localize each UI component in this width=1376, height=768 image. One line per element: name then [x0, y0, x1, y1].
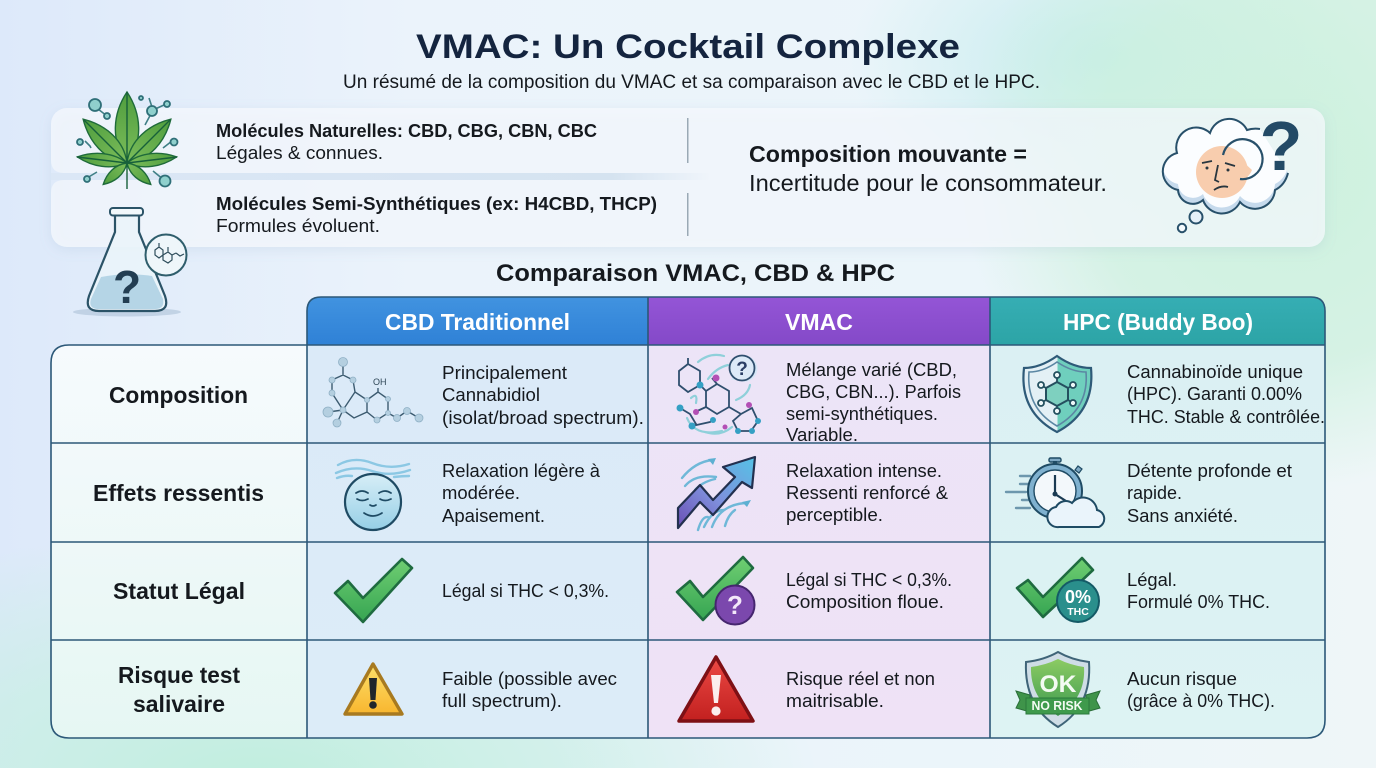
semi-synthetic molecules text: Formules évoluent. — [216, 215, 380, 236]
cell: VMAC composition: Variable. — [786, 424, 858, 445]
moving composition callout — [749, 141, 1107, 196]
moving composition callout: Composition mouvante = — [749, 141, 1027, 167]
cell: VMAC legal: Légal si THC < 0,3%. — [786, 569, 952, 590]
icon: check with 0% THC badge: 0% — [1065, 587, 1091, 607]
cell: CBD legal: Légal si THC < 0,3%. — [442, 580, 609, 601]
panel: composition summary — [51, 108, 1325, 247]
row labels column: Effets ressentis — [93, 480, 264, 506]
icon: confused thought bubble: ? — [1260, 107, 1302, 185]
cell: HPC effects — [1006, 458, 1292, 527]
cell: VMAC composition: CBG, CBN...). Parfois — [786, 381, 961, 402]
icon: OK no risk shield — [1016, 652, 1100, 727]
icon: flask with question mark: ? — [113, 261, 141, 313]
icon: cannabidiol molecule — [323, 358, 423, 427]
cell: CBD risk — [345, 664, 617, 714]
cell: HPC effects: rapide. — [1127, 482, 1182, 503]
column: HPC: HPC (Buddy Boo) — [1063, 309, 1253, 335]
cell: CBD effects — [336, 460, 601, 530]
row labels column: Risque test — [118, 662, 240, 688]
icon: check with question mark: ? — [727, 590, 743, 620]
cell: HPC legal: Formulé 0% THC. — [1127, 591, 1270, 612]
cell: VMAC composition — [676, 355, 961, 445]
cell: HPC risk — [1016, 652, 1275, 727]
natural molecules text: Molécules Naturelles: CBD, CBG, CBN, CBC — [216, 120, 597, 141]
cell: VMAC composition: Mélange varié (CBD, — [786, 359, 957, 380]
cell: CBD composition: Cannabidiol — [442, 384, 540, 405]
row labels column: salivaire — [133, 691, 225, 717]
icon: red warning — [679, 657, 753, 721]
cell: HPC composition: THC. Stable & contrôlée. — [1127, 406, 1325, 427]
comparison table — [51, 297, 1325, 738]
icon: check with question mark — [677, 557, 754, 624]
cell: CBD effects: Relaxation légère à — [442, 460, 601, 481]
cell: VMAC risk: Risque réel et non — [786, 668, 935, 689]
cell: VMAC risk: maitrisable. — [786, 690, 884, 711]
heading: comparison: Comparaison VMAC, CBD & HPC — [496, 260, 895, 287]
icon: OK no risk shield: NO RISK — [1032, 699, 1082, 713]
cell: HPC risk: (grâce à 0% THC). — [1127, 690, 1275, 711]
icon: cannabidiol molecule: OH — [373, 377, 386, 387]
cell: VMAC effects: Ressenti renforcé & — [786, 482, 949, 503]
column: HPC — [990, 297, 1325, 738]
column: VMAC — [648, 297, 990, 738]
cell: HPC risk: Aucun risque — [1127, 668, 1237, 689]
icon: relaxed face — [336, 460, 410, 530]
cell: CBD risk: full spectrum). — [442, 690, 562, 711]
icon: OK no risk shield: OK — [1040, 671, 1077, 698]
icon: flask with question mark — [73, 208, 186, 316]
title: VMAC: Un Cocktail Complexe — [416, 28, 960, 66]
cell: HPC legal: Légal. — [1127, 569, 1177, 590]
cell: CBD effects: Apaisement. — [442, 505, 545, 526]
cell: VMAC legal — [677, 557, 952, 624]
icon: cannabis leaf with molecules — [76, 92, 178, 189]
column: CBD Traditionnel: CBD Traditionnel — [385, 309, 570, 335]
row labels column: Statut Légal — [113, 578, 245, 604]
column: VMAC: VMAC — [785, 309, 853, 335]
cell: HPC composition — [1023, 356, 1325, 432]
icon: rising arrow — [678, 457, 755, 530]
semi-synthetic molecules text: Molécules Semi-Synthétiques (ex: H4CBD, THCP) — [216, 193, 657, 214]
icon: check with 0% THC badge — [1017, 558, 1099, 622]
moving composition callout: Incertitude pour le consommateur. — [749, 170, 1107, 196]
icon: yellow warning — [345, 664, 402, 714]
cell: VMAC legal: Composition floue. — [786, 591, 944, 612]
cell: VMAC effects: Relaxation intense. — [786, 460, 942, 481]
natural molecules text — [216, 120, 597, 163]
semi-synthetic molecules text — [216, 193, 657, 236]
cell: HPC composition: (HPC). Garanti 0.00% — [1127, 383, 1302, 404]
cell: HPC effects: Détente profonde et — [1127, 460, 1292, 481]
subtitle: Un résumé de la composition du VMAC et sa comparaison avec le CBD et le HPC. — [343, 71, 1040, 93]
cell: VMAC effects: perceptible. — [786, 504, 883, 525]
icon: confused thought bubble — [1162, 118, 1298, 234]
icon: check with 0% THC badge: THC — [1067, 606, 1089, 618]
cell: HPC composition: Cannabinoïde unique — [1127, 361, 1303, 382]
row labels column: Composition — [109, 382, 248, 408]
column: CBD Traditionnel — [307, 297, 648, 738]
icon: green check — [335, 559, 412, 622]
cell: CBD composition: (isolat/broad spectrum). — [442, 407, 644, 428]
grid lines — [51, 297, 1325, 738]
cell: VMAC composition: semi-synthétiques. — [786, 403, 938, 424]
cell: CBD composition — [323, 358, 644, 428]
cell: HPC legal — [1017, 558, 1270, 622]
icon: stopwatch with cloud — [1006, 458, 1104, 527]
cell: CBD risk: Faible (possible avec — [442, 668, 617, 689]
row labels column — [51, 345, 307, 738]
cell: VMAC risk — [679, 657, 935, 721]
natural molecules text: Légales & connues. — [216, 142, 383, 163]
cell: CBD composition: Principalement — [442, 362, 567, 383]
cell: CBD effects: modérée. — [442, 482, 520, 503]
icon: shield with molecule — [1023, 356, 1091, 432]
cell: VMAC effects — [678, 457, 949, 530]
icon: mixed molecules: ? — [736, 359, 748, 380]
cell: CBD legal — [335, 559, 609, 622]
cell: HPC effects: Sans anxiété. — [1127, 505, 1238, 526]
icon: mixed molecules — [676, 355, 761, 434]
